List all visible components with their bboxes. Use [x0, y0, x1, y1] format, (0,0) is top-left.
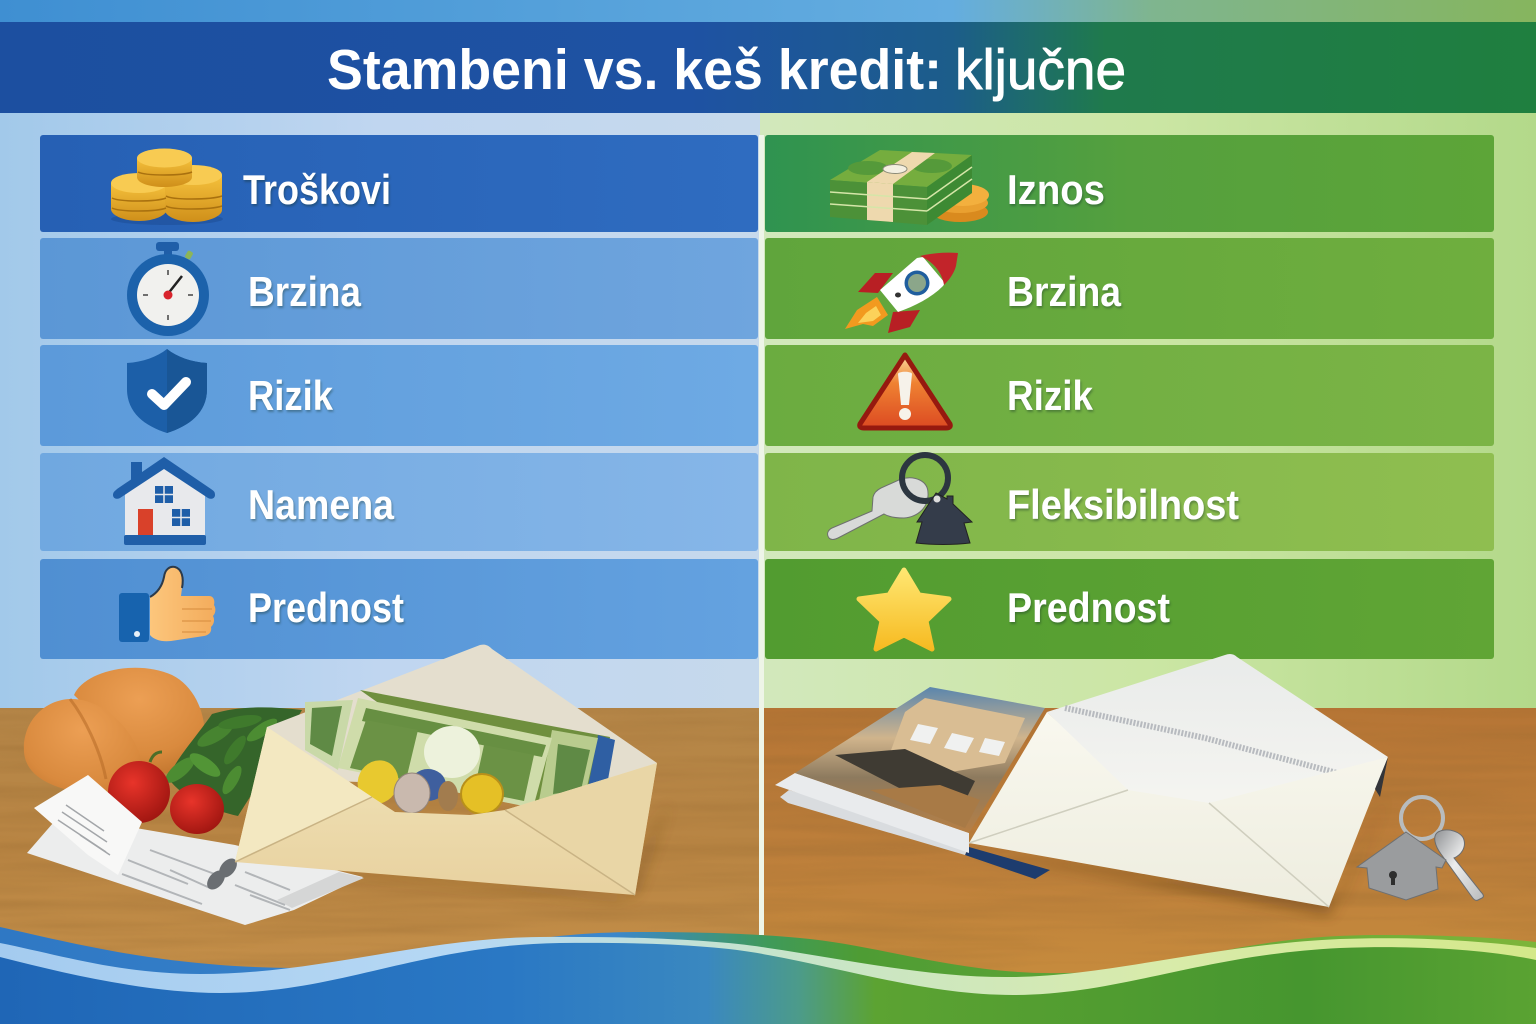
right wooden table	[760, 708, 1536, 978]
icon: stopwatch	[127, 242, 209, 336]
row: Namena	[40, 453, 758, 551]
label: Troškovi	[243, 166, 391, 213]
panel: stambeni kredit rows	[40, 135, 758, 659]
envelope front	[235, 727, 657, 895]
bread loaves	[24, 668, 205, 803]
centre divider	[759, 135, 764, 935]
label: Rizik	[1007, 372, 1094, 419]
banknotes	[305, 690, 615, 808]
row: Rizik	[40, 345, 758, 446]
receipts	[27, 775, 364, 925]
label: Iznos	[1007, 166, 1105, 213]
tomatoes	[108, 752, 224, 834]
row: Prednost	[765, 559, 1494, 659]
scene: food, receipts and cash envelope	[24, 645, 670, 925]
shadows	[235, 800, 670, 900]
row: Iznos	[765, 135, 1494, 232]
house key set	[1357, 797, 1483, 900]
icon: rocket	[845, 253, 958, 333]
icon: cash stack	[830, 150, 989, 225]
brochure	[775, 687, 1050, 879]
label: Prednost	[248, 584, 404, 631]
scene: brochure, white envelope and keys	[775, 654, 1483, 915]
wave: base	[0, 943, 1536, 1024]
panel: keš kredit rows	[765, 135, 1494, 659]
row: Predost	[40, 559, 758, 659]
icon: shield	[127, 349, 207, 433]
icon: star	[859, 570, 949, 649]
label: Brzina	[1007, 268, 1122, 315]
label: Prednost	[1007, 584, 1170, 631]
icon: keys	[828, 455, 972, 544]
icon: thumbs up	[119, 567, 215, 642]
title: ključne	[955, 38, 1126, 102]
row: Rizik	[765, 345, 1494, 446]
row: Brzina	[40, 238, 758, 339]
row: Fleksibilnost	[765, 453, 1494, 551]
wave: light ribbon	[0, 937, 1536, 1024]
title: Stambeni vs. keš kredit:	[327, 38, 942, 102]
white envelope	[969, 654, 1388, 907]
shadow	[969, 790, 1390, 915]
label: Brzina	[248, 268, 362, 315]
greens	[162, 707, 302, 816]
row: Brzina	[765, 238, 1494, 339]
icon: house	[113, 457, 215, 545]
right background	[760, 113, 1536, 713]
top gradient strip	[0, 0, 1536, 22]
wave: outer band	[0, 927, 1536, 1024]
row: Troškovi	[40, 135, 758, 232]
label: Fleksibilnost	[1007, 481, 1239, 528]
title banner	[0, 22, 1536, 113]
icon: coins	[111, 148, 223, 225]
coins	[351, 754, 503, 814]
left background	[0, 113, 760, 713]
label: Rizik	[248, 372, 334, 419]
footer waves	[0, 927, 1536, 1024]
icon: warning triangle	[860, 355, 950, 428]
label: Namena	[248, 481, 395, 528]
cream envelope	[235, 645, 657, 895]
left wooden table	[0, 708, 760, 978]
